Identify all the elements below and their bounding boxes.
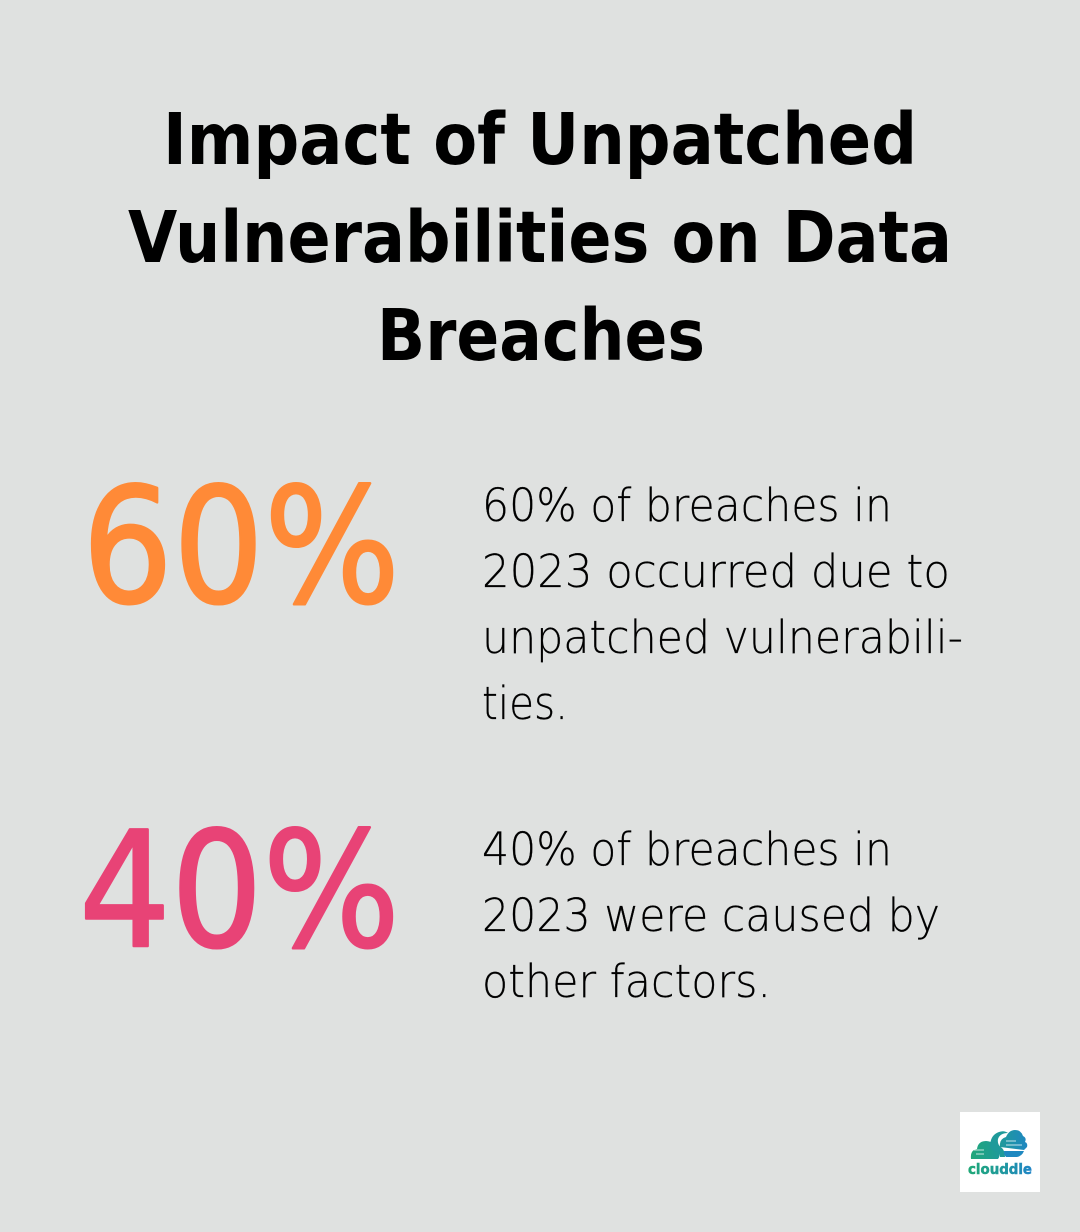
title <box>128 98 952 377</box>
text block: 60% description: unpatched vulnerabili- <box>482 611 963 664</box>
text block: 60% description: ties. <box>482 677 568 730</box>
text block: 40% description: 2023 were caused by <box>482 889 940 942</box>
text block: 40% description <box>482 823 940 1008</box>
stat: 40%: 40% <box>79 797 400 984</box>
text block: 60% description <box>482 479 963 730</box>
stat: 60%: 60% <box>82 453 400 640</box>
icon: clouds <box>971 1130 1027 1159</box>
text block: 60% description: 2023 occurred due to <box>482 545 950 598</box>
text block: 40% description: other factors. <box>482 955 771 1008</box>
text block: 40% description: 40% of breaches in <box>482 823 892 876</box>
text block: 60% description: 60% of breaches in <box>482 479 892 532</box>
title: Breaches <box>377 294 705 377</box>
logo: clouddle <box>960 1112 1040 1192</box>
title: Impact of Unpatched <box>163 98 917 181</box>
title: Vulnerabilities on Data <box>128 196 952 279</box>
logo wordmark: clouddle <box>968 1162 1032 1178</box>
